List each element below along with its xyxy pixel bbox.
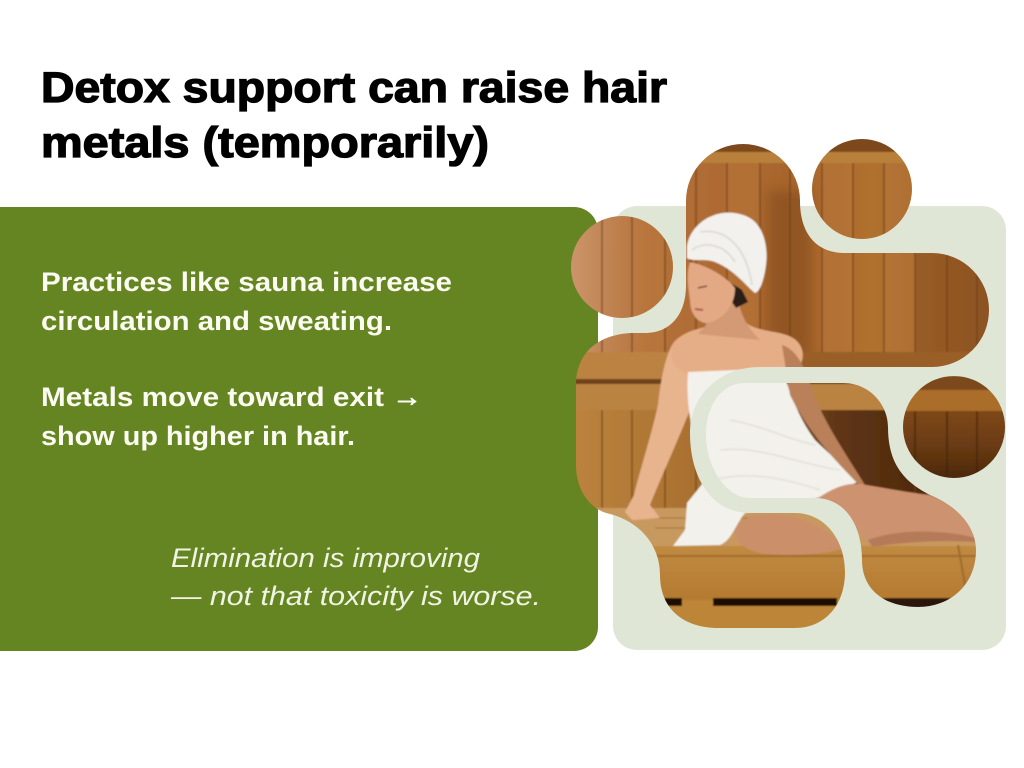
wall shadow <box>768 190 812 360</box>
right arm <box>782 345 868 490</box>
photo: woman in towel in sauna <box>560 130 1010 630</box>
bench seat <box>596 507 976 547</box>
head towel <box>687 213 767 293</box>
panel: pale image backdrop <box>613 206 1006 650</box>
panel: green text panel <box>0 207 598 651</box>
hair <box>690 255 748 308</box>
lower wall <box>576 409 963 509</box>
body towel <box>673 368 858 546</box>
knee and thigh <box>735 514 845 555</box>
extended leg <box>818 484 976 547</box>
wood wall <box>571 162 989 353</box>
bench slit <box>713 598 837 606</box>
text block: sauna explanation <box>41 267 452 336</box>
wall plank seams <box>602 163 977 355</box>
text block: sauna explanation: circulation and sweating. <box>41 306 392 336</box>
callout: italic conclusion: — not that toxicity is worse. <box>170 581 541 611</box>
left arm <box>625 345 692 520</box>
lower bench rail <box>576 382 884 412</box>
face <box>688 262 735 323</box>
upper bench rail <box>560 352 1010 379</box>
wall plank variation <box>748 179 914 352</box>
shadow under leg <box>868 532 976 547</box>
callout: italic conclusion: Elimination is improving <box>171 543 480 573</box>
bench front <box>652 546 976 601</box>
title: Detox support can raise hair <box>41 64 667 112</box>
text block: sauna explanation: Practices like sauna increase <box>41 267 452 297</box>
neck <box>698 302 759 340</box>
text block: metals move toward exit: Metals move toward exit → <box>41 382 422 412</box>
title: metals (temporarily) <box>41 119 489 167</box>
circle beam at lower right <box>918 376 990 390</box>
title <box>41 64 667 167</box>
text block: metals move toward exit <box>41 382 422 451</box>
shoulders and chest <box>671 322 803 375</box>
callout: italic conclusion <box>170 543 541 611</box>
text block: metals move toward exit: show up higher in hair. <box>41 421 355 451</box>
